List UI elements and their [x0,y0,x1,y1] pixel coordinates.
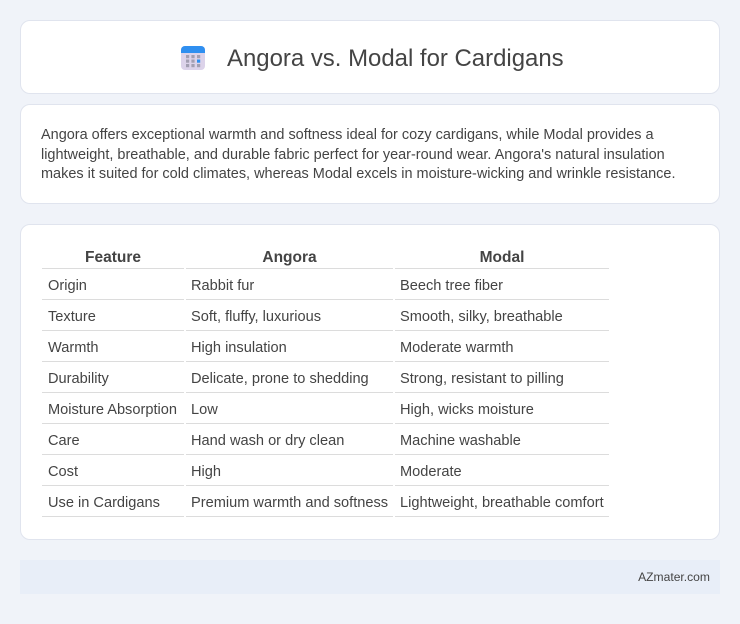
comparison table: Lightweight, breathable comfort [400,495,604,511]
comparison table: High, wicks moisture [400,402,534,418]
icon: calendar [181,46,205,70]
comparison table: Premium warmth and softness [191,495,388,511]
intro card [20,104,720,204]
title card [20,20,720,94]
comparison table: Smooth, silky, breathable [400,309,563,325]
footer bar [20,560,720,594]
header: Modal: Modal [480,249,524,266]
comparison table: Warmth [48,340,99,356]
comparison table: Durability [48,371,109,387]
comparison table: Moderate warmth [400,340,514,356]
header: Feature: Feature [85,249,141,266]
comparison table: High [191,464,221,480]
comparison table: Delicate, prone to shedding [191,371,369,387]
comparison table: Moderate [400,464,462,480]
comparison table: Moisture Absorption [48,402,177,418]
comparison table: High insulation [191,340,287,356]
comparison table: Use in Cardigans [48,495,160,511]
comparison table: Texture [48,309,96,325]
comparison table: Care [48,433,80,449]
intro text: makes it suited for cold climates, whereas Modal excels in moisture-wicking and wrinkle resistance. [41,166,675,182]
comparison table: Origin [48,278,87,294]
intro text: lightweight, breathable, and durable fabric perfect for year-round wear. Angora's natural insulation [41,146,665,162]
intro text: Angora offers exceptional warmth and softness ideal for cozy cardigans, while Modal provides a [41,127,654,143]
comparison table: Soft, fluffy, luxurious [191,309,321,325]
comparison table: Low [191,402,218,418]
comparison table: Strong, resistant to pilling [400,371,564,387]
header: Angora: Angora [262,249,317,266]
comparison table: Rabbit fur [191,278,254,294]
comparison table: Machine washable [400,433,521,449]
title: Angora vs. Modal for Cardigans [227,45,564,72]
intro text [41,127,675,182]
footer text: AZmater.com [638,570,710,584]
comparison table: Cost [48,464,78,480]
comparison table: Beech tree fiber [400,278,503,294]
comparison table [42,249,609,517]
table card [20,224,720,540]
comparison table: Hand wash or dry clean [191,433,344,449]
